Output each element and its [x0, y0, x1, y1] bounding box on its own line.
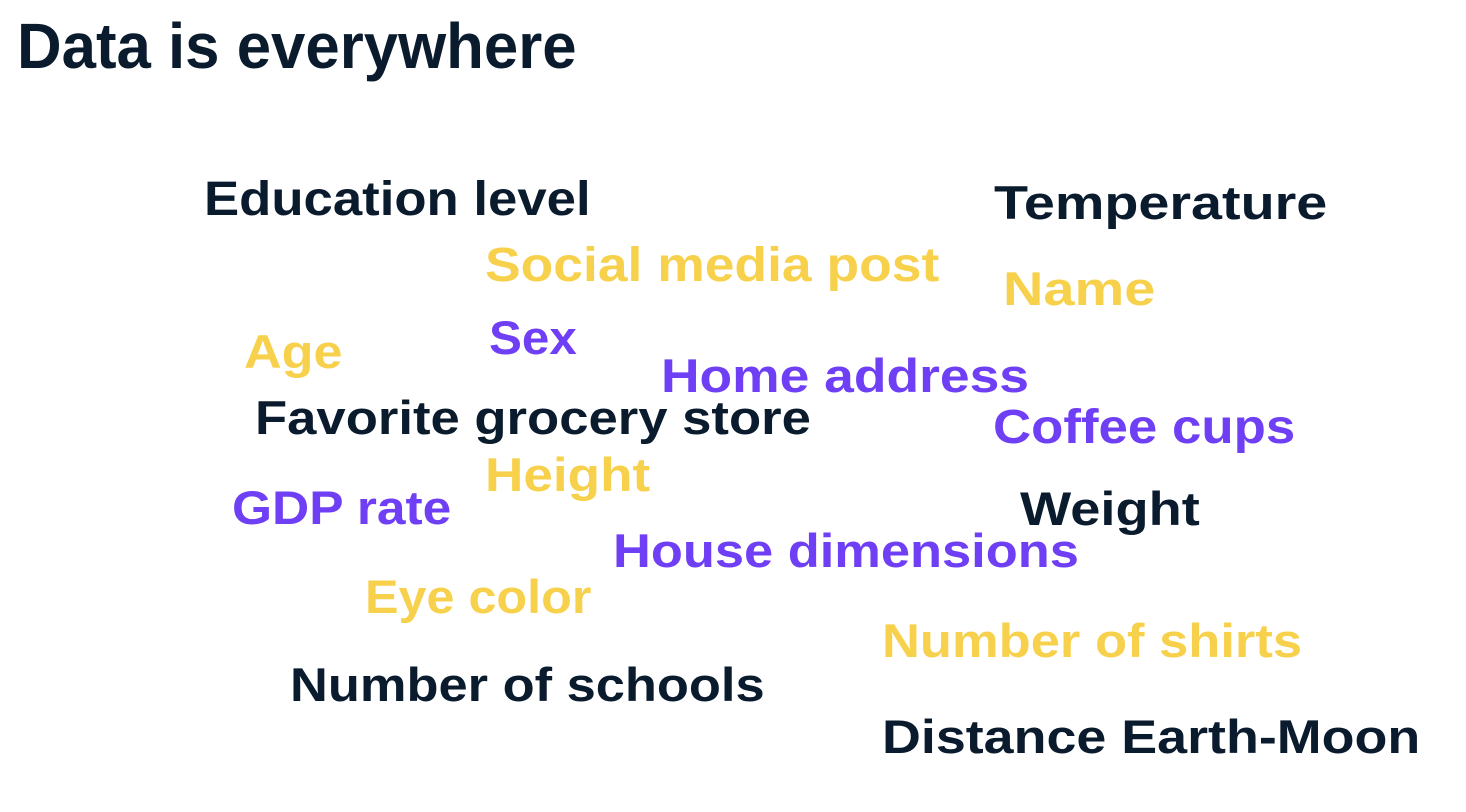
- word: Name: Name: [1003, 262, 1155, 315]
- word: Height: Height: [485, 448, 650, 501]
- word: Temperature: Temperature: [994, 176, 1327, 229]
- title: Data is everywhere: [17, 10, 577, 82]
- word: Favorite grocery store: Favorite grocery store: [255, 391, 811, 444]
- word: Number of schools: Number of schools: [290, 658, 765, 711]
- word: Education level: Education level: [204, 173, 591, 226]
- word: Weight: Weight: [1020, 482, 1200, 535]
- word: Eye color: Eye color: [365, 570, 591, 623]
- word: Sex: Sex: [489, 311, 577, 364]
- word: House dimensions: House dimensions: [613, 524, 1079, 577]
- word: Number of shirts: Number of shirts: [882, 614, 1302, 667]
- word: Age: Age: [244, 325, 343, 378]
- word: Home address: Home address: [661, 349, 1029, 402]
- word: Distance Earth-Moon: Distance Earth-Moon: [882, 710, 1420, 763]
- word: GDP rate: GDP rate: [232, 481, 451, 534]
- word: Coffee cups: Coffee cups: [993, 401, 1295, 454]
- word: Social media post: Social media post: [485, 239, 939, 292]
